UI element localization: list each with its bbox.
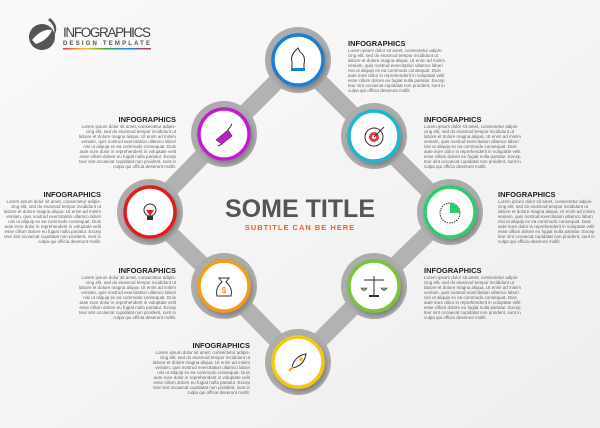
text block 4: Lorem ipsum dolor sit amet, consectetur adipis-: [424, 275, 519, 280]
text block 5: esse cillum dolore eu fugiat nulla pariatur. Excep: [153, 380, 250, 385]
text block 1: culpa qui officia deserunt mollit.: [348, 88, 411, 93]
subtitle: SUBTITLE CAN BE HERE: [245, 223, 355, 232]
title: SOME TITLE: [225, 195, 375, 223]
text block 5: nisi ut aliquip ex ea commodo consequat. Duis: [157, 370, 251, 375]
text block 2: culpa qui officia deserunt mollit.: [424, 164, 487, 169]
text block 4: [424, 266, 521, 320]
circle 8: chair: [199, 109, 249, 159]
text block 7: Lorem ipsum dolor sit amet, consectetur adipis-: [6, 199, 101, 204]
text block 2: veniam, quis nostrud exercitation ullamco labori: [424, 139, 519, 144]
text block 7: veniam, quis nostrud exercitation ullamco labori: [6, 214, 101, 219]
text block 1: cing elit, sed do eiusmod tempor incididunt ut: [348, 53, 439, 58]
text block 3: nisi ut aliquip ex ea commodo consequat. Duis: [498, 219, 592, 224]
text block 6: Lorem ipsum dolor sit amet, consectetur adipis-: [81, 275, 176, 280]
text block 1: aute irure dolor in reprehenderit in voluptate velit: [348, 73, 445, 78]
text block 8: nisi ut aliquip ex ea commodo consequat. Duis: [83, 144, 177, 149]
logo: DESIGN TEMPLATE: [63, 41, 151, 47]
circle 6: money bag: $: [222, 286, 227, 295]
text block 5: aute irure dolor in reprehenderit in voluptate velit: [153, 375, 251, 380]
text block 8: culpa qui officia deserunt mollit.: [113, 164, 176, 169]
text block 3: [498, 190, 595, 244]
text block 7: aute irure dolor in reprehenderit in voluptate velit: [4, 224, 102, 229]
text block 5: Lorem ipsum dolor sit amet, consectetur adipis-: [155, 350, 250, 355]
text block 6: labore et dolore magna aliqua. Ut enim ad minim: [79, 285, 176, 290]
logo: INFOGRAPHICS: [63, 25, 151, 40]
text block 5: culpa qui officia deserunt mollit.: [187, 390, 250, 395]
text block 3: cing elit, sed do eiusmod tempor incididunt ut: [498, 204, 589, 209]
text block 1: nisi ut aliquip ex ea commodo consequat. Duis: [348, 68, 442, 73]
text block 2: cing elit, sed do eiusmod tempor incididunt ut: [424, 129, 515, 134]
text block 5: cing elit, sed do eiusmod tempor incididunt ut: [160, 355, 251, 360]
circle 5: rocket: [273, 337, 323, 387]
text block 6: esse cillum dolore eu fugiat nulla pariatur. Excep: [79, 305, 176, 310]
text block 3: veniam, quis nostrud exercitation ullamco labori: [498, 214, 593, 219]
text block 2: Lorem ipsum dolor sit amet, consectetur adipis-: [424, 124, 519, 129]
text block 7: esse cillum dolore eu fugiat nulla pariatur. Excep: [4, 229, 101, 234]
text block 5: labore et dolore magna aliqua. Ut enim ad minim: [153, 360, 250, 365]
circle 7: light bulb: [125, 187, 175, 237]
text block 1: INFOGRAPHICS: [348, 39, 406, 48]
text block 7: INFOGRAPHICS: [43, 190, 101, 199]
text block 3: esse cillum dolore eu fugiat nulla pariatur. Excep: [498, 229, 595, 234]
text block 4: aute irure dolor in reprehenderit in voluptate velit: [424, 300, 521, 305]
text block 4: cing elit, sed do eiusmod tempor incididunt ut: [424, 280, 515, 285]
circle 6: money bag: [199, 261, 249, 311]
text block 1: labore et dolore magna aliqua. Ut enim ad minim: [348, 58, 445, 63]
text block 4: labore et dolore magna aliqua. Ut enim ad minim: [424, 285, 521, 290]
text block 4: INFOGRAPHICS: [424, 266, 482, 275]
text block 8: labore et dolore magna aliqua. Ut enim ad minim: [79, 134, 176, 139]
text block 6: [79, 266, 177, 320]
text block 3: culpa qui officia deserunt mollit.: [498, 239, 561, 244]
text block 4: veniam, quis nostrud exercitation ullamco labori: [424, 290, 519, 295]
text block 6: nisi ut aliquip ex ea commodo consequat. Duis: [83, 295, 177, 300]
text block 4: culpa qui officia deserunt mollit.: [424, 315, 487, 320]
text block 2: esse cillum dolore eu fugiat nulla pariatur. Excep: [424, 154, 521, 159]
text block 6: teur sint occaecat cupidatat non proident, sunt in: [79, 310, 176, 315]
text block 5: [153, 341, 251, 395]
text block 6: aute irure dolor in reprehenderit in voluptate velit: [79, 300, 177, 305]
text block 5: veniam, quis nostrud exercitation ullamco labori: [155, 365, 250, 370]
text block 8: teur sint occaecat cupidatat non proident, sunt in: [79, 159, 176, 164]
text block 1: esse cillum dolore eu fugiat nulla pariatur. Excep: [348, 78, 445, 83]
text block 6: cing elit, sed do eiusmod tempor incididunt ut: [86, 280, 177, 285]
text block 6: veniam, quis nostrud exercitation ullamco labori: [81, 290, 176, 295]
text block 7: cing elit, sed do eiusmod tempor incididunt ut: [11, 204, 102, 209]
text block 7: teur sint occaecat cupidatat non proident, sunt in: [4, 234, 101, 239]
text block 3: labore et dolore magna aliqua. Ut enim ad minim: [498, 209, 595, 214]
text block 2: labore et dolore magna aliqua. Ut enim ad minim: [424, 134, 521, 139]
text block 7: nisi ut aliquip ex ea commodo consequat. Duis: [8, 219, 102, 224]
text block 1: [348, 39, 445, 93]
text block 8: INFOGRAPHICS: [118, 115, 176, 124]
text block 5: teur sint occaecat cupidatat non proident, sunt in: [153, 385, 250, 390]
text block 5: INFOGRAPHICS: [192, 341, 250, 350]
text block 3: aute irure dolor in reprehenderit in voluptate velit: [498, 224, 595, 229]
circle 1: chess knight: [273, 35, 323, 85]
text block 8: aute irure dolor in reprehenderit in voluptate velit: [79, 149, 177, 154]
text block 8: esse cillum dolore eu fugiat nulla pariatur. Excep: [79, 154, 176, 159]
text block 3: INFOGRAPHICS: [498, 190, 556, 199]
text block 2: teur sint occaecat cupidatat non proident, sunt in: [424, 159, 521, 164]
text block 4: nisi ut aliquip ex ea commodo consequat. Duis: [424, 295, 518, 300]
text block 3: Lorem ipsum dolor sit amet, consectetur adipis-: [498, 199, 593, 204]
diamond connector band: [117, 27, 483, 395]
circle 2: target: [349, 111, 399, 161]
text block 2: nisi ut aliquip ex ea commodo consequat. Duis: [424, 144, 518, 149]
text block 2: aute irure dolor in reprehenderit in voluptate velit: [424, 149, 521, 154]
circle 3: clock: [425, 187, 475, 237]
text block 1: teur sint occaecat cupidatat non proident, sunt in: [348, 83, 445, 88]
circle 4: scales: [349, 261, 399, 311]
text block 8: Lorem ipsum dolor sit amet, consectetur adipis-: [81, 124, 176, 129]
text block 6: INFOGRAPHICS: [118, 266, 176, 275]
text block 3: teur sint occaecat cupidatat non proident, sunt in: [498, 234, 595, 239]
text block 4: teur sint occaecat cupidatat non proident, sunt in: [424, 310, 521, 315]
text block 7: [4, 190, 102, 244]
logo: [29, 18, 151, 50]
text block 8: [79, 115, 177, 169]
text block 8: cing elit, sed do eiusmod tempor incididunt ut: [86, 129, 177, 134]
text block 7: labore et dolore magna aliqua. Ut enim ad minim: [4, 209, 101, 214]
text block 1: veniam, quis nostrud exercitation ullamco labori: [348, 63, 443, 68]
text block 1: Lorem ipsum dolor sit amet, consectetur adipis-: [348, 48, 443, 53]
text block 2: INFOGRAPHICS: [424, 115, 482, 124]
text block 7: culpa qui officia deserunt mollit.: [38, 239, 101, 244]
text block 4: esse cillum dolore eu fugiat nulla pariatur. Excep: [424, 305, 521, 310]
text block 2: [424, 115, 521, 169]
text block 6: culpa qui officia deserunt mollit.: [113, 315, 176, 320]
text block 8: veniam, quis nostrud exercitation ullamco labori: [81, 139, 176, 144]
